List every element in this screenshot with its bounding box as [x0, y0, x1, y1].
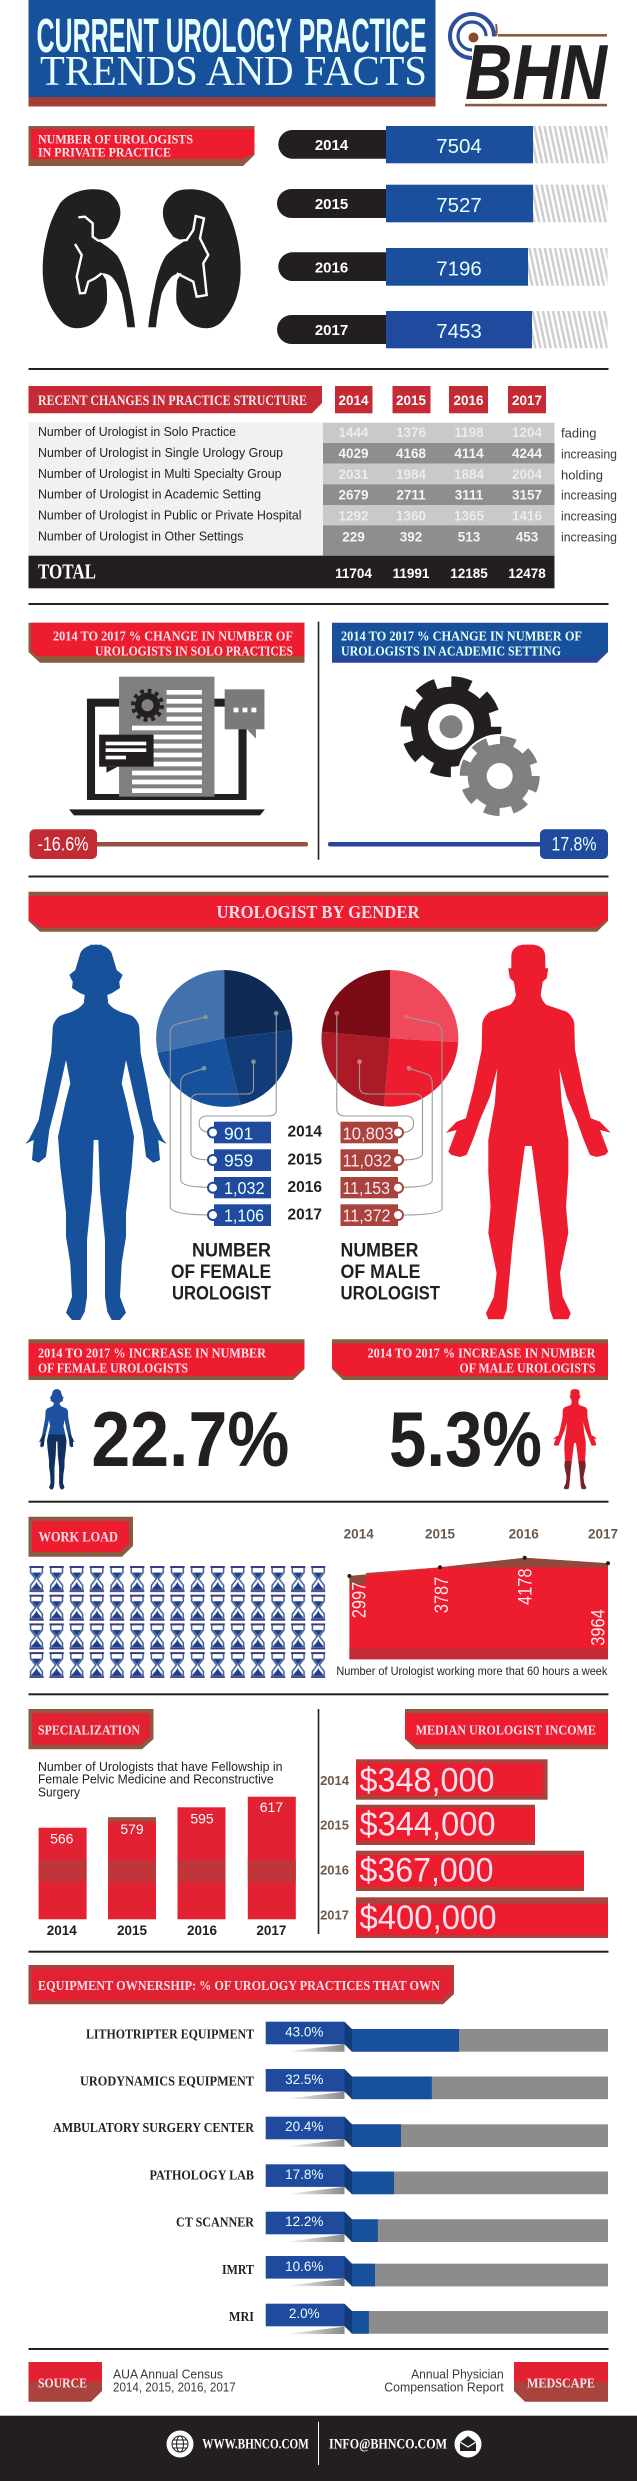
row: mri: [229, 2304, 608, 2334]
bar chart: income: $367,000: [360, 1852, 494, 1890]
table values: 2679: [338, 487, 369, 502]
row: pathology lab: 17.8%: [285, 2167, 323, 2182]
chart caption: Number of Urologist working more that 60 hours a week: [336, 1664, 608, 1678]
bar chart: fellowship: 2016: [187, 1923, 218, 1938]
male values by year: [340, 1122, 403, 1226]
table heading ribbon: [28, 386, 322, 413]
label: number of male urologist: OF MALE: [340, 1262, 420, 1283]
table year headers: 2017: [512, 393, 542, 408]
male values by year: 11,153: [342, 1178, 390, 1198]
table values: 1984: [396, 467, 427, 482]
footer: [0, 2416, 637, 2481]
label: number of female urologist: OF FEMALE: [171, 1262, 271, 1283]
source: aua census: [28, 2362, 236, 2402]
bar chart: fellowship: 595: [190, 1810, 214, 1826]
title banner: [28, 0, 436, 106]
panel: median income: [320, 1709, 608, 1938]
leader lines: pies to values: [170, 1013, 442, 1215]
ribbon: specialization: [28, 1709, 154, 1749]
row: ct scanner: [176, 2212, 608, 2242]
ribbon: median income: [405, 1709, 608, 1749]
row: lithotripter: [86, 2022, 608, 2052]
table values: 1198: [454, 425, 484, 440]
panel: practice structure table: [28, 386, 617, 588]
area chart: urologists working over 60 hours: 2017: [588, 1526, 618, 1541]
bar 2015: 2015: [315, 196, 348, 213]
label: number of male urologist: NUMBER: [340, 1241, 419, 1262]
label: number of male urologist: UROLOGIST: [340, 1283, 440, 1304]
female values by year: 901: [224, 1123, 253, 1143]
panel: solo practices change: [28, 623, 308, 859]
bar 2017: [277, 311, 608, 348]
table values: 229: [342, 530, 365, 545]
bar 2016: 2016: [315, 260, 348, 276]
panel: male increase: [332, 1339, 608, 1489]
icon: hourglass grid: [29, 1566, 325, 1678]
ribbon: median income: MEDIAN UROLOGIST INCOME: [416, 1723, 596, 1738]
icon: envelope: [454, 2430, 482, 2458]
table values: 4029: [338, 446, 369, 461]
icon: globe: [166, 2430, 194, 2458]
icon: laptop with documents: [69, 677, 265, 815]
logo: BHN: [450, 14, 608, 116]
icon: gears: [407, 683, 542, 818]
table year headers: 2016: [453, 393, 484, 408]
row: lithotripter: LITHOTRIPTER EQUIPMENT: [86, 2026, 254, 2041]
panel: female increase: [28, 1339, 304, 1489]
stat: 5.3%: 5.3%: [389, 1395, 542, 1483]
table values: 1376: [396, 425, 427, 440]
panel: equipment ownership: [28, 1965, 608, 2334]
table values: 4168: [396, 446, 427, 461]
table values: 1365: [454, 508, 485, 523]
row: urodynamics: [80, 2069, 608, 2099]
male values by year: 11,032: [342, 1151, 392, 1171]
table total row: 12185: [450, 566, 488, 581]
table total row: 11991: [393, 566, 430, 581]
heading: urologist by gender: [28, 892, 608, 932]
icon: kidneys: [43, 189, 241, 328]
table year headers: 2015: [396, 393, 427, 408]
bar chart: income: [320, 1759, 608, 1938]
ribbon: solo practices: UROLOGISTS IN SOLO PRACTICES: [95, 643, 293, 658]
year labels: 2017: [287, 1206, 322, 1223]
table year headers: 2014: [338, 393, 369, 408]
icon: small female: [39, 1389, 75, 1489]
female values by year: 1,032: [224, 1178, 265, 1198]
stat: 22.7%: 22.7%: [91, 1395, 289, 1483]
table values: 2711: [396, 487, 426, 502]
label: number of female urologist: [171, 1241, 271, 1304]
bar 2015: 7527: [436, 194, 482, 217]
table total row: [28, 556, 554, 588]
pie chart: female urologists: [156, 970, 292, 1107]
row: pathology lab: [150, 2164, 608, 2194]
ribbon: work load: [28, 1517, 133, 1557]
ribbon: academic setting: UROLOGISTS IN ACADEMIC SETTING: [341, 643, 561, 658]
bar chart: fellowship: 2015: [117, 1923, 148, 1938]
table values: 4244: [512, 446, 543, 461]
year labels: [287, 1124, 322, 1223]
table trend labels: increasing: [561, 530, 617, 545]
ribbon: urologists in private practice: IN PRIVATE PRACTICE: [38, 146, 171, 160]
table trend labels: [561, 425, 617, 545]
table row labels: Number of Urologist in Other Settings: [38, 529, 244, 543]
table values: 392: [400, 530, 422, 545]
female values by year: [208, 1122, 271, 1226]
footer: INFO@BHNCO.COM: [329, 2436, 447, 2452]
male values by year: 11,372: [342, 1205, 390, 1225]
area chart: urologists working over 60 hours: 2997: [350, 1582, 371, 1618]
footer: WWW.BHNCO.COM: [202, 2436, 309, 2452]
row: pathology lab: PATHOLOGY LAB: [150, 2167, 254, 2182]
logo: BHN: BHN: [465, 28, 608, 116]
pie leader dots: [202, 1011, 411, 1071]
row: ct scanner: CT SCANNER: [176, 2215, 254, 2230]
slider: 17.8%: 17.8%: [552, 834, 597, 856]
table year headers: [335, 386, 546, 413]
table trend labels: increasing: [561, 488, 617, 503]
bar chart: fellowship: 2014: [47, 1923, 77, 1938]
bar chart: income: 2017: [320, 1907, 349, 1922]
bar 2014: [278, 126, 608, 163]
icon: male silhouette: [446, 945, 611, 1319]
table values: 4114: [454, 446, 484, 461]
table values: 3157: [512, 487, 542, 502]
table total row: 11704: [335, 566, 372, 581]
slider: -16.6%: -16.6%: [38, 834, 89, 856]
year labels: 2014: [287, 1124, 322, 1141]
bar chart: income: 2015: [320, 1817, 349, 1832]
icon: female silhouette: [25, 945, 167, 1320]
panel: specialization: [28, 1709, 296, 1938]
female values by year: 959: [224, 1151, 253, 1171]
table total row: 12478: [508, 566, 546, 581]
row: ambulatory surgery center: AMBULATORY SURGERY CENTER: [53, 2120, 254, 2135]
ribbon: male increase: 2014 TO 2017 % INCREASE IN NUMBER: [368, 1345, 596, 1360]
table trend labels: increasing: [561, 509, 617, 524]
source: aua census: SOURCE: [38, 2376, 87, 2391]
label: number of female urologist: NUMBER: [192, 1241, 271, 1262]
year labels: 2015: [287, 1151, 322, 1168]
source: medscape: [384, 2362, 608, 2402]
table values: 1292: [338, 508, 369, 523]
label: number of male urologist: [340, 1241, 440, 1304]
row: ambulatory surgery center: [53, 2117, 608, 2147]
bar 2016: 7196: [436, 258, 482, 280]
bar 2017: 7453: [436, 320, 482, 343]
row: imrt: 10.6%: [285, 2259, 323, 2274]
area chart: urologists working over 60 hours: 4178: [515, 1568, 536, 1605]
table row labels: Number of Urologist in Multi Specialty Group: [38, 467, 282, 481]
table values: 1360: [396, 508, 426, 523]
bar chart: private practice by year: [277, 126, 608, 348]
source: medscape: MEDSCAPE: [527, 2376, 595, 2391]
male values by year: 10,803: [342, 1123, 394, 1143]
ribbon: female increase: OF FEMALE UROLOGISTS: [38, 1361, 188, 1376]
bar chart: fellowship: 566: [50, 1830, 74, 1846]
ribbon: equipment ownership: EQUIPMENT OWNERSHIP: % OF UROLOGY PRACTICES THAT OWN: [38, 1979, 440, 1994]
slider: 17.8%: [328, 829, 608, 859]
ribbon: academic setting: 2014 TO 2017 % CHANGE IN NUMBER OF: [341, 628, 582, 643]
bar chart: fellowship: 579: [120, 1821, 144, 1837]
ribbon: male increase: OF MALE UROLOGISTS: [460, 1361, 596, 1376]
row: urodynamics: URODYNAMICS EQUIPMENT: [80, 2073, 254, 2088]
ribbon: female increase: 2014 TO 2017 % INCREASE IN NUMBER: [38, 1345, 266, 1360]
bar 2014: 2014: [315, 137, 349, 154]
bar chart: income: $344,000: [360, 1806, 496, 1844]
row: imrt: [222, 2256, 608, 2286]
bar chart: income: $348,000: [360, 1762, 494, 1800]
bar 2014: 7504: [436, 135, 482, 158]
table values: 1204: [512, 425, 543, 440]
bar 2017: 2017: [315, 322, 348, 339]
table row labels: Number of Urologist in Public or Private Hospital: [38, 508, 302, 522]
ribbon: academic setting: [332, 623, 608, 663]
row: urodynamics: 32.5%: [285, 2072, 323, 2087]
female values by year: 1,106: [224, 1205, 264, 1225]
description: Female Pelvic Medicine and Reconstructive: [38, 1773, 274, 1787]
panel: academic setting change: [328, 623, 608, 859]
row: mri: MRI: [229, 2309, 254, 2324]
row: ct scanner: 12.2%: [285, 2214, 323, 2229]
bar chart: income: $400,000: [360, 1899, 496, 1937]
panel: work load: [28, 1517, 618, 1678]
ribbon: equipment ownership: [28, 1965, 454, 2004]
ribbon: specialization: SPECIALIZATION: [38, 1723, 140, 1738]
year labels: 2016: [287, 1179, 322, 1196]
source: aua census: 2014, 2015, 2016, 2017: [113, 2379, 236, 2394]
table row labels: Number of Urologist in Solo Practice: [38, 425, 236, 439]
table heading ribbon: RECENT CHANGES IN PRACTICE STRUCTURE: [38, 393, 307, 409]
ribbon: urologists in private practice: [28, 126, 254, 166]
source: aua census: AUA Annual Census: [113, 2366, 223, 2381]
row: imrt: IMRT: [222, 2262, 254, 2277]
area chart: urologists working over 60 hours: 3787: [432, 1577, 453, 1613]
row: mri: 2.0%: [289, 2306, 320, 2321]
ribbon: female increase: [28, 1339, 304, 1380]
description: [38, 1760, 283, 1800]
icon: small male: [553, 1389, 597, 1489]
table values: [338, 425, 543, 545]
area chart: urologists working over 60 hours: 3964: [588, 1609, 610, 1646]
bar chart: income: 2016: [320, 1862, 349, 1877]
area chart: urologists working over 60 hours: 2014: [344, 1526, 374, 1541]
row: lithotripter: 43.0%: [285, 2024, 323, 2040]
table values: 2004: [512, 467, 543, 482]
table trend labels: increasing: [561, 446, 617, 461]
bar 2015: [277, 185, 608, 222]
pie chart: male urologists: [321, 970, 458, 1107]
description: Surgery: [38, 1786, 81, 1800]
bar chart: fellowship: 2017: [256, 1923, 286, 1938]
bar chart: income: 2014: [320, 1773, 350, 1788]
heading: urologist by gender: UROLOGIST BY GENDER: [216, 902, 420, 922]
table values: 1884: [454, 467, 485, 482]
table values: 2031: [338, 467, 369, 482]
table row labels: [38, 425, 302, 543]
area chart: urologists working over 60 hours: [344, 1526, 618, 1659]
ribbon: urologists in private practice: NUMBER OF UROLOGISTS: [38, 132, 193, 146]
table row labels: Number of Urologist in Single Urology Group: [38, 446, 283, 460]
row: ambulatory surgery center: 20.4%: [285, 2119, 323, 2134]
slider: -16.6%: [30, 829, 308, 859]
table values: 1416: [512, 508, 543, 523]
bar chart: fellowship: 617: [260, 1799, 283, 1815]
table values: 453: [516, 530, 539, 545]
bar 2016: [278, 248, 608, 286]
ribbon: work load: WORK LOAD: [38, 1530, 118, 1546]
table values: 1444: [338, 425, 369, 440]
table row labels: Number of Urologist in Academic Setting: [38, 487, 261, 501]
ribbon: male increase: [332, 1339, 608, 1380]
source: medscape: Compensation Report: [384, 2379, 504, 2394]
table values: 513: [458, 530, 481, 545]
table total row: TOTAL: [38, 559, 96, 583]
ribbon: solo practices: [28, 623, 304, 663]
title line 2: TRENDS AND FACTS: [40, 49, 427, 95]
source: medscape: Annual Physician: [411, 2366, 504, 2381]
area chart: urologists working over 60 hours: 2016: [509, 1526, 539, 1541]
table trend labels: holding: [561, 467, 603, 482]
description: Number of Urologists that have Fellowship in: [38, 1760, 283, 1774]
ribbon: solo practices: 2014 TO 2017 % CHANGE IN NUMBER OF: [53, 628, 293, 643]
table values: 3111: [455, 487, 484, 502]
table trend labels: fading: [561, 425, 596, 440]
area chart: urologists working over 60 hours: 2015: [425, 1526, 456, 1541]
label: number of female urologist: UROLOGIST: [172, 1283, 271, 1304]
bar chart: fellowship: [39, 1797, 296, 1938]
